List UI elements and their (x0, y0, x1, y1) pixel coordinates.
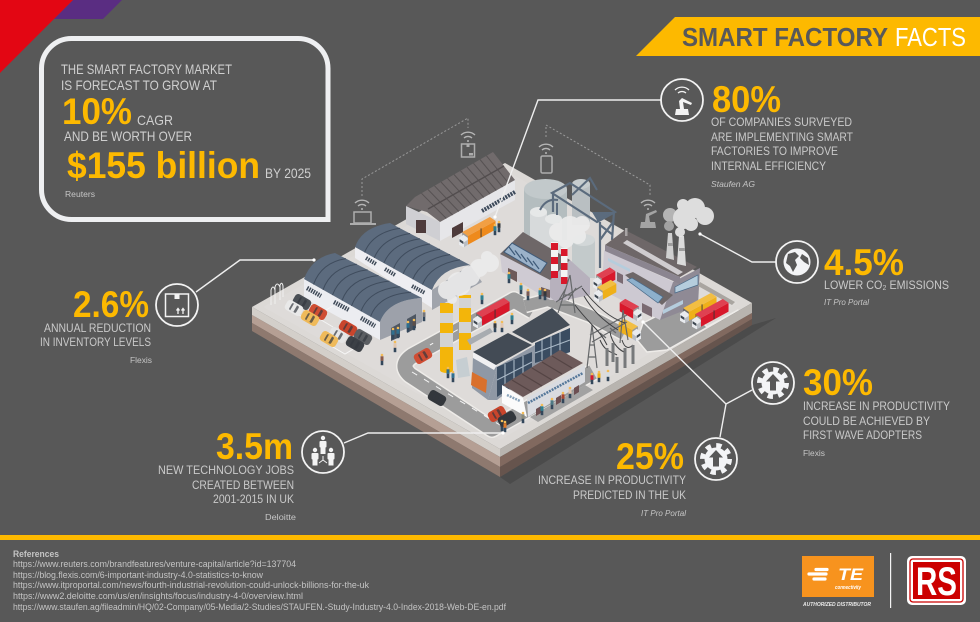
building: dark roof works (456, 308, 570, 400)
logo: RS: RS (916, 560, 957, 604)
icon: phone (539, 144, 553, 173)
connected device icons and dashed links (350, 118, 657, 228)
panel: market forecast: BY 2025 (265, 165, 311, 181)
footer divider (0, 535, 980, 540)
text: 4.5 percent: LOWER CO₂ EMISSIONS (824, 278, 949, 292)
workers (380, 221, 610, 432)
text: 80 percent: ARE IMPLEMENTING SMART (711, 130, 854, 144)
building: rear arched warehouse (355, 223, 482, 310)
text: 4.5 percent: IT Pro Portal (824, 297, 870, 307)
vehicles: trucks at plant (593, 267, 729, 341)
references: https://www.staufen.ag/fileadmin/HQ/02-Company/05-Media/2-Studies/STAUFEN.-Study-Industry-4.0-Index-2018-Web-DE-en.pdf (13, 602, 506, 612)
icon: people (302, 431, 344, 473)
text: 25 percent: 25% (616, 436, 684, 477)
panel: market forecast: IS FORECAST TO GROW AT (61, 77, 217, 93)
building: white and brown hall (502, 350, 585, 417)
panel: market forecast: CAGR (137, 112, 173, 128)
silos and steel frame (524, 178, 615, 278)
references: https://www2.deloitte.com/us/en/insights/focus/industry-4-0/overview.html (13, 591, 303, 601)
icon: globe (776, 241, 818, 283)
callout: 25 percent (538, 436, 737, 518)
text: 2.6 percent: 2.6% (73, 284, 149, 325)
building: sawtooth warehouse (406, 152, 515, 241)
vehicle: red truck (473, 298, 510, 328)
text: 3.5m: 2001-2015 IN UK (213, 492, 294, 506)
icon: robot arm (640, 200, 657, 228)
vehicles: parked cars (283, 293, 518, 428)
smoke: yellow chimneys (438, 251, 499, 304)
icon: wireless robot arm (661, 79, 703, 121)
text: 3.5m (158, 426, 296, 522)
panel: market forecast: Reuters (65, 189, 95, 199)
callout: 30 and 25 percent connector (641, 320, 752, 437)
icon: productivity gear (752, 362, 794, 404)
references: https://blog.flexis.com/6-important-industry-4.0-statistics-to-know (13, 570, 263, 580)
title banner (636, 17, 980, 56)
text: 3.5m: NEW TECHNOLOGY JOBS (158, 463, 294, 477)
text: 2.6 percent (40, 284, 152, 365)
logo: TE connectivity: AUTHORIZED DISTRIBUTOR (802, 602, 871, 608)
building: front arched warehouse (304, 253, 422, 341)
text: 25 percent: PREDICTED IN THE UK (573, 488, 686, 502)
text: 30 percent: FIRST WAVE ADOPTERS (803, 428, 922, 442)
references: https://www.reuters.com/brandfeatures/venture-capital/article?id=137704 (13, 559, 296, 569)
smoke: grey chimneys (663, 198, 714, 237)
smoke: red chimneys (549, 216, 590, 248)
corner accent: red triangle and purple band (0, 0, 122, 73)
text: 4.5 percent: 4.5% (824, 242, 904, 283)
building: solar roof hall (500, 232, 590, 302)
text: 25 percent: INCREASE IN PRODUCTIVITY (538, 473, 686, 487)
references: References (13, 549, 59, 559)
text: 3.5m: Deloitte (265, 512, 296, 522)
icon: laptop (350, 200, 376, 224)
text: 30 percent (803, 362, 950, 458)
title banner: SMART FACTORY (682, 24, 888, 52)
panel: market forecast (42, 38, 328, 219)
text: 30 percent: Flexis (803, 448, 825, 458)
text: 2.6 percent: IN INVENTORY LEVELS (40, 335, 151, 349)
text: 80 percent: INTERNAL EFFICIENCY (711, 159, 826, 173)
text: 4.5 percent (824, 242, 949, 307)
text: 25 percent (538, 436, 687, 518)
icon: inventory box (156, 284, 198, 326)
panel: market forecast: AND BE WORTH OVER (64, 128, 192, 144)
fence (271, 283, 283, 305)
icon: productivity gear (695, 438, 737, 480)
callout: 4.5 percent (698, 232, 949, 307)
logo: TE connectivity: TE (838, 565, 864, 584)
logo: TE connectivity: connectivity (835, 585, 862, 591)
platform (252, 163, 776, 484)
references (13, 549, 506, 612)
power pylons and insulators (556, 275, 633, 373)
icon: parcel (461, 132, 475, 157)
text: 80 percent: FACTORIES TO IMPROVE (711, 144, 838, 158)
references: https://www.itproportal.com/news/fourth-industrial-revolution-could-unlock-billions-for-the-uk (13, 580, 369, 590)
divider between logos (890, 553, 891, 608)
text: 30 percent: INCREASE IN PRODUCTIVITY (803, 399, 950, 413)
text: 80 percent: Staufen AG (711, 179, 755, 189)
title banner: FACTS (895, 24, 966, 52)
text: 30 percent: COULD BE ACHIEVED BY (803, 414, 930, 428)
callout: 30 percent (752, 362, 950, 458)
road network (296, 300, 738, 429)
text: 2.6 percent: Flexis (130, 355, 152, 365)
yellow and white chimneys (440, 295, 471, 373)
building: main plant with grey chimneys (602, 228, 735, 320)
text: 25 percent: IT Pro Portal (641, 508, 687, 518)
text: 3.5m: CREATED BETWEEN (192, 478, 294, 492)
callout: 3.5m jobs (158, 426, 505, 522)
isometric factory illustration (252, 152, 776, 484)
text: 30 percent: 30% (803, 362, 873, 403)
text: 3.5m: 3.5m (216, 426, 293, 467)
text: 80 percent (711, 79, 854, 189)
panel: market forecast: 10% (62, 91, 132, 132)
callout: 80 percent (493, 79, 854, 219)
panel: market forecast: $155 billion (67, 145, 260, 186)
logo: TE connectivity (802, 556, 874, 608)
vehicle: orange truck (459, 217, 496, 247)
text: 2.6 percent: ANNUAL REDUCTION (44, 321, 151, 335)
red and white chimneys (551, 242, 568, 284)
panel: market forecast: THE SMART FACTORY MARKET (61, 61, 232, 77)
text: 80 percent: OF COMPANIES SURVEYED (711, 115, 852, 129)
callout: 2.6 percent (40, 258, 316, 365)
text: 80 percent: 80% (712, 79, 781, 120)
